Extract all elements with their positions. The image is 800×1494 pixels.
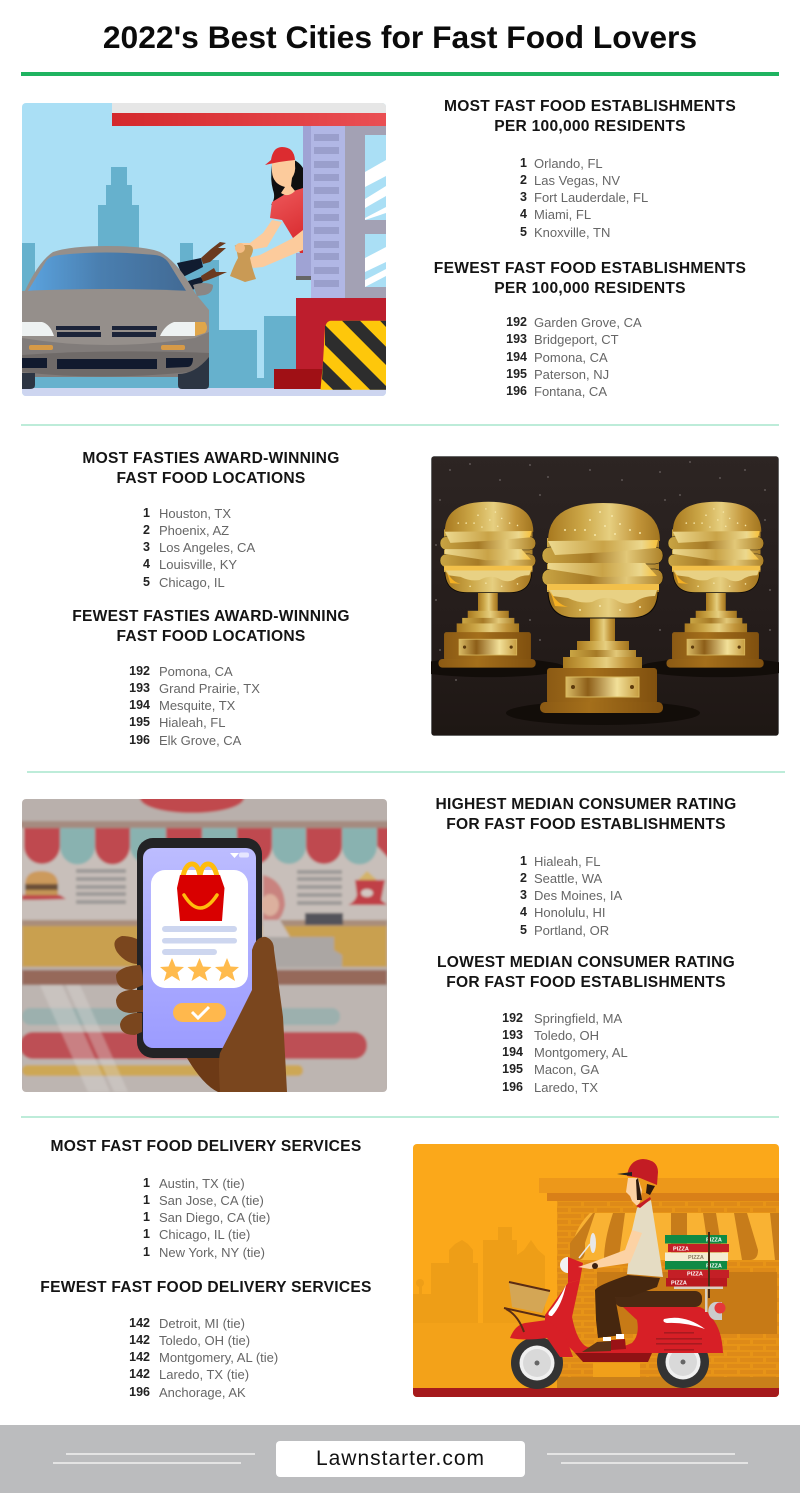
illustration: phone rating app [22, 799, 387, 1092]
list: fewest establishments: 196 [506, 384, 527, 398]
list: lowest rating [502, 1010, 628, 1095]
text block: most fasties: MOST FASTIES AWARD-WINNING [82, 450, 340, 466]
list: most establishments: 3 [520, 190, 527, 204]
list: lowest rating: Toledo, OH [534, 1028, 599, 1043]
text block: fewest fasties [72, 608, 350, 644]
list: lowest rating: 193 [502, 1028, 523, 1042]
list: most establishments: Knoxville, TN [534, 225, 610, 240]
list: most fasties: 5 [143, 575, 150, 589]
list: most delivery: New York, NY (tie) [159, 1245, 265, 1260]
list: highest rating: Honolulu, HI [534, 905, 606, 920]
text block: fewest fasties: FEWEST FASTIES AWARD-WINNING [72, 608, 350, 624]
text block: lowest rating [437, 954, 735, 991]
list: most delivery: 1 [143, 1210, 150, 1224]
list: fewest fasties: Pomona, CA [159, 664, 233, 678]
text block: lowest rating: LOWEST MEDIAN CONSUMER RATING [437, 954, 735, 971]
list: most establishments: 5 [520, 225, 527, 239]
text block: most fasties [82, 450, 340, 486]
arms from car [201, 242, 227, 282]
list: fewest fasties: 196 [129, 733, 150, 747]
car [22, 246, 209, 377]
text block: most establishments: PER 100,000 RESIDENTS [494, 118, 686, 134]
list: fewest establishments [506, 315, 642, 399]
list: lowest rating: 195 [502, 1062, 523, 1076]
footer logo [276, 1441, 525, 1477]
list: fewest fasties: Mesquite, TX [159, 698, 235, 713]
list: most delivery: 1 [143, 1193, 150, 1207]
text block: fewest establishments: FEWEST FAST FOOD ESTABLISHMENTS [434, 260, 746, 276]
list: fewest establishments: 193 [506, 332, 527, 346]
list: highest rating: Portland, OR [534, 923, 609, 938]
list: most fasties: Los Angeles, CA [159, 540, 255, 555]
list: fewest fasties [129, 664, 260, 748]
list: fewest delivery: 142 [129, 1333, 150, 1347]
list: highest rating: 5 [520, 923, 527, 937]
list: most fasties: 2 [143, 523, 150, 537]
list: highest rating: 4 [520, 905, 527, 919]
list: most establishments [520, 156, 648, 240]
list: fewest delivery: Detroit, MI (tie) [159, 1316, 245, 1330]
list: fewest delivery: Toledo, OH (tie) [159, 1333, 250, 1348]
text block: most delivery: MOST FAST FOOD DELIVERY SERVICES [50, 1138, 361, 1154]
list: highest rating: Seattle, WA [534, 871, 602, 886]
list: fewest delivery: Montgomery, AL (tie) [159, 1350, 278, 1365]
list: fewest fasties: 194 [129, 698, 150, 712]
list: most fasties: Chicago, IL [159, 575, 225, 590]
list: highest rating: 2 [520, 871, 527, 885]
list: lowest rating: Macon, GA [534, 1062, 599, 1077]
pizza boxes: PIZZA [671, 1280, 687, 1286]
text block: highest rating: HIGHEST MEDIAN CONSUMER RATING [436, 796, 736, 813]
list: most fasties: 3 [143, 540, 150, 554]
pizza boxes: PIZZA [673, 1246, 689, 1252]
list: most delivery: Chicago, IL (tie) [159, 1227, 250, 1242]
list: most fasties [143, 506, 256, 590]
list: most delivery: San Diego, CA (tie) [159, 1210, 270, 1225]
list: fewest delivery: Laredo, TX (tie) [159, 1367, 249, 1382]
list: highest rating [520, 854, 622, 938]
list: most establishments: Las Vegas, NV [534, 173, 620, 188]
list: fewest delivery: 142 [129, 1367, 150, 1381]
list: most fasties: Louisville, KY [159, 557, 237, 572]
pizza boxes: PIZZA [687, 1272, 703, 1278]
list: fewest delivery: Anchorage, AK [159, 1385, 246, 1400]
list: fewest fasties: 192 [129, 664, 150, 678]
list: most delivery: 1 [143, 1227, 150, 1241]
title: 2022's Best Cities for Fast Food Lovers [103, 19, 697, 55]
list: lowest rating: 194 [502, 1045, 523, 1059]
list: lowest rating: Laredo, TX [534, 1080, 598, 1095]
list: fewest establishments: 194 [506, 350, 527, 364]
list: most fasties: Phoenix, AZ [159, 523, 229, 538]
list: fewest fasties: 195 [129, 715, 150, 729]
footer band [0, 1425, 800, 1493]
list: most delivery: Austin, TX (tie) [159, 1176, 245, 1190]
text block: most fasties: FAST FOOD LOCATIONS [116, 470, 305, 486]
pizza boxes: PIZZA [706, 1264, 722, 1270]
list: fewest delivery: 142 [129, 1350, 150, 1364]
text block: highest rating: FOR FAST FOOD ESTABLISHMENTS [446, 816, 726, 833]
list: fewest establishments: Paterson, NJ [534, 367, 609, 382]
list: fewest establishments: 195 [506, 367, 527, 381]
list: lowest rating: Springfield, MA [534, 1010, 622, 1026]
text block: most establishments [444, 98, 736, 134]
text block: fewest establishments: PER 100,000 RESIDENTS [494, 280, 686, 296]
list: most establishments: 4 [520, 207, 527, 221]
list: most establishments: Orlando, FL [534, 156, 603, 170]
list: lowest rating: 192 [502, 1010, 523, 1024]
text block: fewest establishments [434, 260, 746, 296]
list: fewest establishments: Bridgeport, CT [534, 332, 619, 347]
list: fewest establishments: 192 [506, 315, 527, 329]
footer logo: Lawnstarter.com [316, 1447, 485, 1470]
list: lowest rating: Montgomery, AL [534, 1045, 628, 1060]
list: highest rating: Hialeah, FL [534, 854, 600, 868]
text block: fewest delivery: FEWEST FAST FOOD DELIVERY SERVICES [40, 1278, 372, 1296]
illustration: golden burger trophies [431, 456, 779, 736]
text block: fewest fasties: FAST FOOD LOCATIONS [116, 628, 305, 644]
list: most delivery: 1 [143, 1245, 150, 1259]
text block: lowest rating: FOR FAST FOOD ESTABLISHMENTS [446, 974, 726, 991]
woman [271, 158, 303, 205]
list: fewest fasties: Elk Grove, CA [159, 733, 241, 748]
list: fewest fasties: 193 [129, 681, 150, 695]
list: lowest rating: 196 [502, 1080, 523, 1094]
text block: highest rating [436, 796, 736, 833]
list: fewest establishments: Fontana, CA [534, 384, 607, 399]
illustration: drive-through window [22, 103, 386, 396]
list: fewest establishments: Garden Grove, CA [534, 315, 642, 330]
list: fewest delivery [129, 1316, 278, 1400]
list: fewest fasties: Grand Prairie, TX [159, 681, 260, 696]
list: fewest delivery: 196 [129, 1385, 150, 1399]
illustration: pizza delivery scooter [413, 1144, 779, 1397]
list: fewest establishments: Pomona, CA [534, 350, 608, 365]
pizza boxes: PIZZA [706, 1238, 722, 1244]
text block: most establishments: MOST FAST FOOD ESTABLISHMENTS [444, 98, 736, 114]
list: most delivery: San Jose, CA (tie) [159, 1193, 264, 1208]
list: fewest delivery: 142 [129, 1316, 150, 1330]
list: highest rating: Des Moines, IA [534, 888, 622, 903]
list: most establishments: 2 [520, 173, 527, 187]
list: highest rating: 1 [520, 854, 527, 868]
list: most delivery: 1 [143, 1176, 150, 1190]
pizza boxes [665, 1235, 729, 1286]
list: most establishments: Miami, FL [534, 207, 591, 222]
list: most fasties: Houston, TX [159, 506, 231, 520]
list: highest rating: 3 [520, 888, 527, 902]
list: most delivery [143, 1176, 270, 1260]
scooter [511, 1337, 563, 1389]
pizza boxes: PIZZA [688, 1255, 704, 1261]
list: most fasties: 4 [143, 557, 150, 571]
list: fewest fasties: Hialeah, FL [159, 715, 225, 730]
bag [230, 245, 256, 282]
list: most fasties: 1 [143, 506, 150, 520]
list: most establishments: 1 [520, 156, 527, 170]
list: most establishments: Fort Lauderdale, FL [534, 190, 648, 205]
